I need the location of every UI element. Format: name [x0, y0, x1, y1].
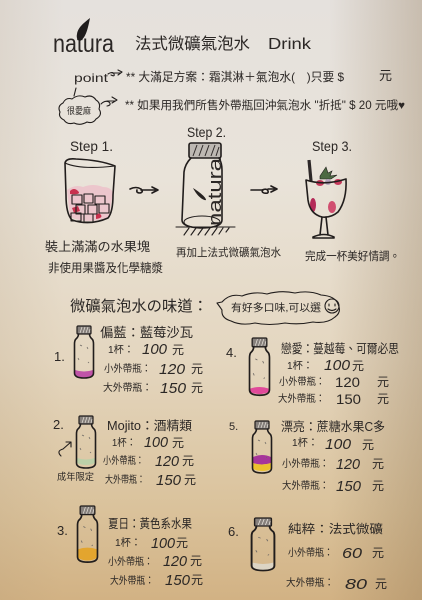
point label: point [74, 71, 109, 85]
cup price: 1杯： [108, 343, 134, 356]
note: refill discount: ** 如果用我們所售外帶瓶回沖氣泡水 "折抵" $ 20 元哦♥ [125, 98, 405, 112]
logo leaf on bottle [193, 188, 206, 200]
small bottle price: 小外帶瓶： [104, 362, 151, 375]
icon: bottle 3 [78, 506, 97, 562]
cloud: recommendation: 很愛麻 [67, 105, 91, 116]
step 2: natura bottle [176, 124, 235, 235]
flavor 1: blue [54, 325, 203, 397]
flavor 5: pretty: 元 [362, 438, 374, 452]
caption step 2: 再加上法式微礦氣泡水 [176, 245, 281, 259]
flavor 3: summer: 120 [163, 553, 188, 570]
cup price: 1杯： [115, 536, 141, 549]
flavor 4: love [226, 338, 399, 407]
flavor 5: pretty [229, 419, 385, 495]
flavor 2: mojito: 元 [172, 436, 184, 450]
icon: logo leaf [77, 18, 90, 41]
large bottle price: 大外帶瓶： [286, 576, 334, 589]
large bottle price: 大外帶瓶： [105, 473, 145, 486]
icon: bottle 2 [76, 416, 96, 468]
speech bubble: many flavors [217, 292, 339, 324]
caption step 1 line 1: 裝上滿滿の水果塊 [45, 239, 151, 254]
large bottle price: 大外帶瓶： [278, 392, 325, 405]
flavor 6: pure: 80 [345, 576, 368, 593]
yuan mark: 元 [379, 68, 392, 83]
arrow: step 2 to step 3 [251, 186, 277, 193]
logo wordmark: natura [53, 30, 114, 58]
flavor name: 夏日：黃色系水果 [108, 516, 192, 531]
flavor 2: mojito: 元 [182, 454, 194, 468]
flavor 6: pure [228, 518, 387, 593]
flavor 6: pure: 60 [342, 545, 363, 562]
small bottle price: 小外帶瓶： [108, 555, 153, 568]
flavor 4: love: 100 [324, 357, 351, 374]
step 1: glass of fruit [65, 138, 115, 223]
flavor 5: pretty: 120 [336, 456, 361, 473]
flavor 6: pure: 元 [372, 546, 384, 560]
flavor 1: blue: 100 [142, 341, 168, 358]
flavor name: 漂亮：蔗糖水果C多 [281, 419, 385, 434]
flavor 4: love: 150 [336, 391, 361, 407]
icon: bottle 6 [252, 518, 274, 571]
cup price: 1杯： [112, 436, 136, 449]
icon: goblet with fruit [306, 160, 346, 238]
flavor 3: summer: 元 [176, 536, 188, 550]
number: 2. [53, 417, 64, 432]
arrow: point [108, 70, 122, 76]
number: 4. [226, 345, 237, 360]
flavor 1: blue: 150 [160, 380, 187, 397]
number: 3. [57, 523, 68, 538]
title: natura logo and drink heading [53, 18, 312, 58]
flavor 2: mojito: 150 [156, 472, 182, 489]
flavor 1: blue: 元 [191, 381, 203, 395]
step label: Step 2. [187, 124, 226, 140]
section heading: flavors: 微礦氣泡水の味道： [70, 297, 208, 315]
icon: bottle 5 [252, 421, 272, 473]
flavor 3: summer: 150 [165, 572, 191, 589]
cloud: recommendation [59, 96, 100, 124]
small bottle price: 小外帶瓶： [288, 546, 333, 559]
cup price: 1杯： [292, 436, 318, 449]
flavor 5: pretty: 元 [372, 479, 384, 493]
caption step 1 line 2: 非使用果醬及化學糖漿 [48, 260, 163, 275]
large bottle price: 大外帶瓶： [282, 479, 329, 492]
ground [176, 227, 235, 235]
flavor name: 戀愛：蔓越莓、可爾必思 [281, 341, 399, 356]
flavor 5: pretty: 150 [336, 478, 362, 495]
large bottle price: 大外帶瓶： [110, 574, 154, 587]
small bottle price: 小外帶瓶： [282, 457, 329, 470]
flavor 2: mojito: 元 [184, 473, 196, 487]
small bottle price: 小外帶瓶： [279, 375, 325, 388]
flavor name: 偏藍：藍莓沙瓦 [100, 325, 193, 340]
heading: drink: Drink [268, 36, 312, 53]
flavor 3: summer [57, 506, 203, 589]
icon: glass with fruit [65, 159, 115, 223]
flavor 3: summer: 元 [190, 554, 202, 568]
flavor 2: mojito: 100 [144, 434, 169, 451]
icon: bottle 4 [250, 338, 269, 395]
flavor 5: pretty: 元 [372, 457, 384, 471]
number: 6. [228, 524, 239, 539]
flavor 1: blue: 元 [191, 362, 203, 376]
line from point to cloud [74, 88, 117, 106]
flavor 5: pretty: 100 [325, 436, 352, 453]
arrow: step 1 to step 2 [130, 187, 158, 193]
flavor name: 純粹：法式微礦 [288, 521, 383, 536]
adults only arrow [59, 442, 71, 456]
caption step 3: 完成一杯美好情調。 [305, 249, 400, 263]
flavor 3: summer: 100 [151, 535, 176, 552]
large bottle price: 大外帶瓶： [103, 381, 152, 394]
step label: Step 1. [70, 138, 113, 154]
promotion notes [59, 68, 405, 124]
icon: bottle 1 [74, 326, 94, 378]
flavor 6: pure: 元 [375, 577, 387, 591]
flavor name: Mojito：酒精類 [107, 419, 193, 433]
flavor 4: love: 120 [335, 374, 360, 390]
bottle wordmark: natura [205, 157, 225, 226]
step captions [45, 239, 400, 275]
flavor 3: summer: 元 [191, 573, 203, 587]
step label: Step 3. [312, 138, 352, 154]
flavor 2: mojito [53, 416, 196, 489]
flavor 1: blue: 元 [172, 343, 184, 357]
flavor 4: love: 元 [377, 392, 389, 406]
flavor 4: love: 元 [377, 375, 389, 389]
flavor 1: blue: 120 [159, 361, 186, 378]
small bottle price: 小外帶瓶： [103, 454, 144, 467]
note: ice cream combo: ** 大滿足方案：霜淇淋＋氣泡水( )只要 $ [126, 69, 344, 84]
step 3: finished drink [306, 138, 352, 238]
adults only label: 成年限定 [57, 471, 94, 483]
heading: product name: 法式微礦氣泡水 [135, 34, 250, 53]
cup price: 1杯： [287, 359, 313, 372]
number: 1. [54, 349, 65, 364]
number: 5. [229, 421, 238, 433]
flavor 4: love: 元 [352, 359, 364, 373]
speech bubble: many flavors: 有好多口味,可以選 [231, 301, 322, 314]
flavor 2: mojito: 120 [155, 453, 180, 470]
